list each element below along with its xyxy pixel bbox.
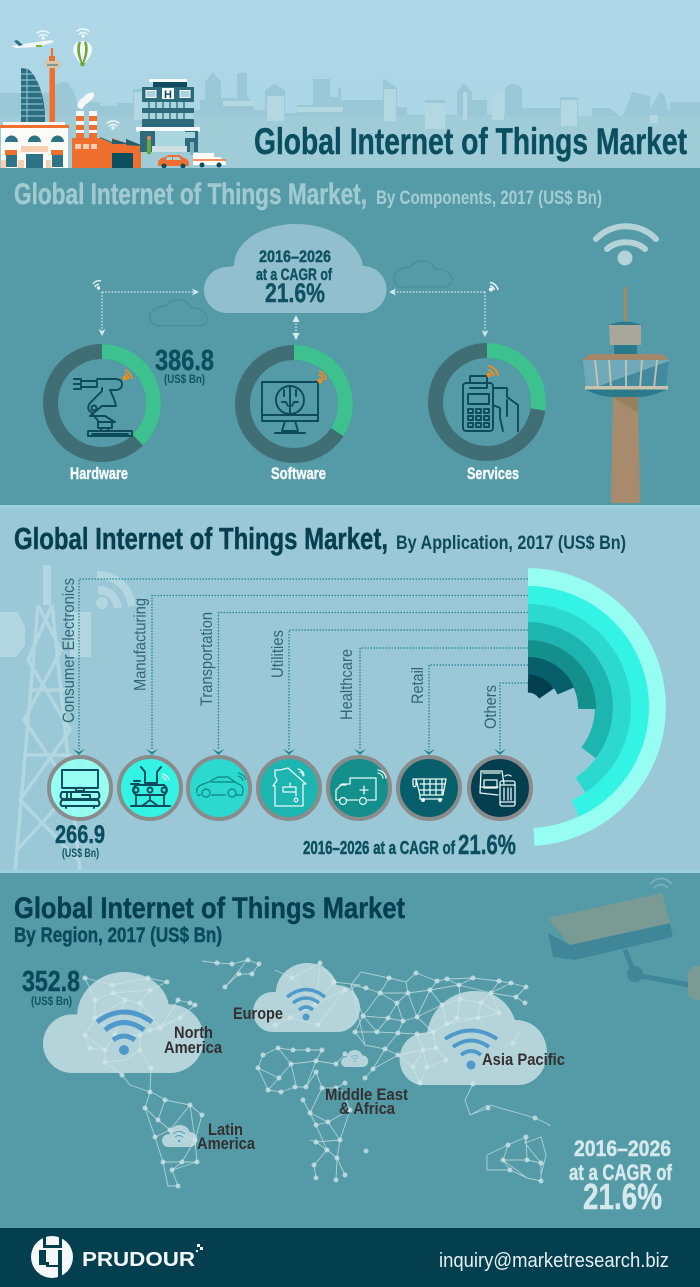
label: utilities: Utilities	[268, 630, 287, 678]
illustration: control tower	[582, 287, 669, 503]
heading: region	[14, 892, 405, 947]
icon: plane wifi	[37, 31, 49, 39]
icon: payment terminal	[463, 376, 518, 431]
heading: application: Global Internet of Things Market,	[14, 521, 388, 556]
callout: application CAGR	[303, 829, 516, 860]
label: 386.8 value	[155, 345, 214, 386]
label: north america: America	[164, 1038, 222, 1057]
panel: header	[0, 0, 700, 169]
illustration: hospital: H	[164, 89, 172, 101]
illustration: plane	[11, 40, 54, 48]
icon: conveyor	[119, 757, 181, 819]
illustration: factory	[72, 137, 141, 169]
cloud: north america	[43, 972, 204, 1073]
callout: region CAGR: 2016–2026	[574, 1136, 671, 1161]
illustration: balloon	[73, 41, 92, 66]
label: north america: North	[174, 1023, 213, 1042]
illustration: ambulance	[193, 153, 226, 168]
icon: wifi europe	[287, 990, 325, 1020]
illustration: white shop building	[0, 122, 69, 169]
logo: prudour wordmark: PRUDOUR	[82, 1248, 195, 1271]
icon: television	[49, 757, 111, 819]
panel: by application	[0, 505, 700, 872]
label: 266.9 value	[55, 821, 105, 860]
label: europe: Europe	[233, 1004, 283, 1023]
icon: robot arm	[74, 379, 132, 436]
icon: wifi hardware connector	[93, 281, 101, 289]
illustration: chimneys	[76, 111, 97, 138]
callout: application CAGR: 21.6%	[458, 829, 516, 860]
label: middle east and africa: & Africa	[339, 1099, 395, 1118]
skyline background	[0, 72, 700, 169]
heading: components: Global Internet of Things Market,	[14, 178, 367, 211]
illustration: security camera	[548, 878, 700, 1000]
connector: transportation	[212, 612, 528, 755]
icon: wifi latin america	[173, 1132, 185, 1142]
icon: wifi services connector	[490, 282, 498, 291]
cloud: latin america	[162, 1125, 197, 1147]
icon: factory wifi	[107, 121, 119, 129]
cloud: middle east	[341, 1050, 368, 1067]
icon: wifi middle east	[351, 1056, 359, 1062]
label: 266.9 value: (US$ Bn)	[62, 848, 99, 860]
chart: radial bars	[528, 577, 657, 837]
icon: outline cloud left	[150, 300, 207, 326]
connector: utilities	[283, 630, 528, 755]
heading: application: By Application, 2017 (US$ Bn)	[396, 532, 626, 554]
label: 352.8 value: 352.8	[22, 966, 80, 998]
heading: region: Global Internet of Things Market	[14, 892, 405, 925]
heading: region: By Region, 2017 (US$ Bn)	[14, 924, 222, 947]
label: healthcare: Healthcare	[337, 649, 356, 720]
label: 352.8 value	[22, 966, 80, 1008]
illustration: factory smoke	[78, 93, 94, 109]
label: hardware: Hardware	[70, 464, 128, 483]
icon: ambulance	[328, 757, 390, 819]
cloud: CAGR: 2016–2026	[259, 247, 331, 266]
cloud: europe	[253, 963, 360, 1032]
connector: retail	[423, 665, 528, 755]
icon: shopping cart	[398, 757, 460, 819]
icon: orange wifi	[487, 366, 498, 377]
icon: orange wifi	[318, 371, 326, 383]
illustration: orange observation tower	[44, 48, 61, 123]
icon: tablet and phone	[469, 757, 531, 819]
illustration: hospital	[136, 79, 200, 155]
illustration: background antenna tower	[0, 565, 132, 872]
heading: components: By Components, 2017 (US$ Bn)	[376, 188, 602, 209]
icon: house with tap	[258, 757, 320, 819]
callout: application CAGR: 2016–2026 at a CAGR of	[303, 838, 456, 858]
connector: consumer electronics	[73, 579, 528, 755]
icon: wifi north america	[97, 1012, 152, 1055]
icon: outline cloud right	[394, 261, 452, 287]
label: others: Others	[481, 685, 500, 729]
label: middle east and africa	[325, 1085, 408, 1118]
label: 266.9 value: 266.9	[55, 821, 105, 849]
label: services: Services	[467, 464, 519, 483]
label: 352.8 value: (US$ Bn)	[31, 994, 72, 1008]
label: 386.8 value: (US$ Bn)	[164, 372, 205, 386]
cloud: CAGR	[204, 224, 386, 313]
callout: region CAGR: 21.6%	[583, 1176, 662, 1217]
label: software: Software	[271, 464, 326, 483]
icon: car	[188, 757, 250, 819]
label: latin america: America	[197, 1134, 255, 1153]
arrow: hardware connectors	[98, 288, 199, 336]
icon: monitor	[262, 382, 318, 433]
chart: software donut	[242, 352, 346, 483]
footer	[0, 1228, 700, 1287]
label: north america	[164, 1023, 222, 1057]
panel: by region	[0, 870, 700, 1228]
cloud: CAGR: 21.6%	[265, 278, 325, 308]
cloud: CAGR: at a CAGR of	[256, 265, 332, 284]
illustration: sail tower	[21, 68, 45, 122]
panel: by components	[0, 168, 700, 506]
label: manufacturing: Manufacturing	[130, 598, 150, 691]
callout: region CAGR	[569, 1136, 673, 1217]
icon: large wifi	[596, 226, 656, 266]
label: latin america: Latin	[208, 1120, 243, 1139]
label: consumer electronics: Consumer Electronics	[59, 578, 78, 723]
label: middle east and africa: Middle East	[325, 1085, 408, 1104]
chart: services donut	[436, 350, 539, 483]
icon: balloon wifi	[77, 29, 89, 37]
chart: network world map	[85, 960, 550, 1186]
icon: orange wifi	[123, 370, 132, 380]
arrow: services connectors	[389, 288, 488, 337]
label: retail: Retail	[408, 667, 427, 704]
chart: hardware donut	[50, 345, 214, 483]
arrow: software connector	[292, 315, 300, 340]
logo: prudour mark	[31, 1236, 73, 1278]
label: transportation: Transportation	[197, 612, 216, 706]
connector: others	[494, 683, 528, 755]
cloud: asia pacific	[400, 991, 547, 1085]
icon: wifi asia pacific	[445, 1030, 497, 1070]
contact email: inquiry@marketresearch.biz	[439, 1250, 669, 1272]
connector: manufacturing	[146, 596, 528, 755]
label: 386.8 value: 386.8	[155, 345, 214, 377]
connector: healthcare	[354, 648, 528, 755]
label: latin america	[197, 1120, 255, 1153]
illustration: orange car	[158, 155, 189, 168]
label: asia pacific: Asia Pacific	[482, 1050, 565, 1069]
